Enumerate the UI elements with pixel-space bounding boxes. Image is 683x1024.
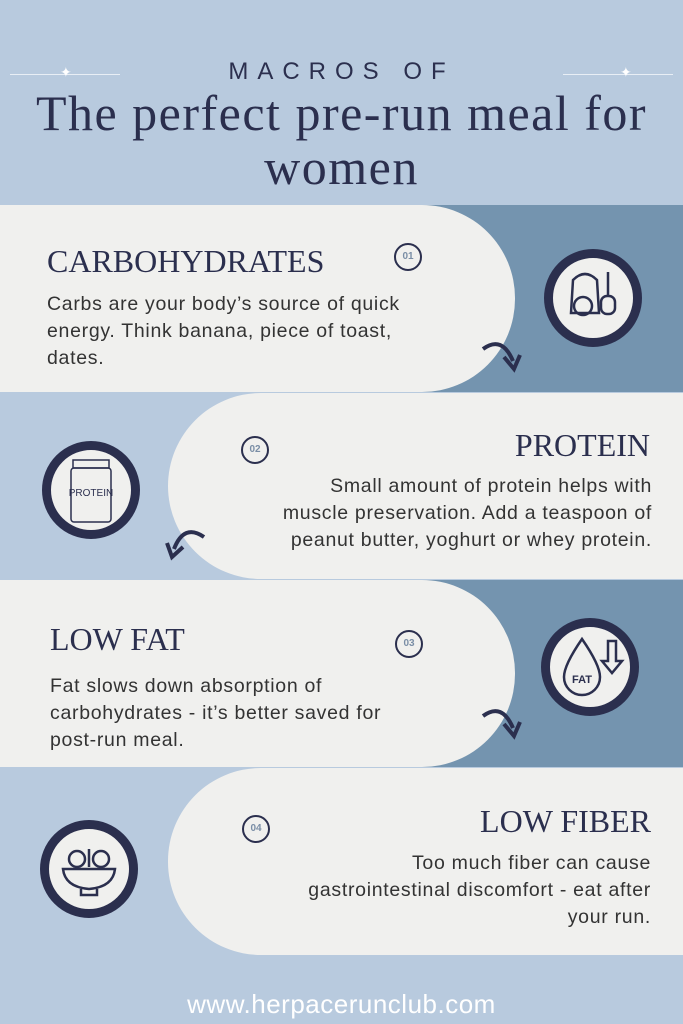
title: women: [264, 139, 419, 195]
panel: low fiber: [40, 768, 683, 955]
number 04: 04: [250, 823, 262, 834]
heading: low fiber: LOW FIBER: [480, 803, 651, 839]
text: fiber: gastrointestinal discomfort - eat after: [308, 879, 651, 901]
number 04: [242, 815, 270, 843]
text: fat: [50, 675, 381, 751]
icon: salad bowl: [40, 820, 138, 918]
text: fat: Fat slows down absorption of: [50, 675, 322, 697]
number 01: 01: [402, 251, 414, 262]
text: protein: [283, 475, 652, 551]
text: carbs: [47, 293, 400, 369]
icon: carbs: [544, 249, 642, 347]
icon: fat: [541, 618, 639, 716]
number 03: [395, 630, 423, 658]
text: carbs: dates.: [47, 347, 104, 369]
number 03: 03: [403, 638, 415, 649]
arrow: [165, 530, 206, 560]
text: carbs: Carbs are your body’s source of quick: [47, 293, 400, 315]
icon: fat: FAT: [572, 674, 592, 686]
arrow: [482, 342, 522, 373]
heading: protein: PROTEIN: [515, 427, 650, 463]
text: fiber: [308, 852, 651, 928]
panel: protein: [42, 393, 683, 579]
icon: protein jar: PROTEIN: [69, 488, 113, 499]
text: fat: carbohydrates - it’s better saved for: [50, 702, 381, 724]
number 02: [241, 436, 269, 464]
title: The perfect pre-run meal for: [36, 85, 647, 141]
title: [36, 58, 647, 195]
number 01: [394, 243, 422, 271]
panel: low fat: [0, 580, 683, 767]
header decoration: ✦: [620, 64, 632, 80]
text: protein: muscle preservation. Add a teaspoon of: [283, 502, 652, 524]
heading: low fat: LOW FAT: [50, 621, 185, 657]
footer url: www.herpacerunclub.com: [187, 989, 496, 1019]
number 02: 02: [249, 444, 261, 455]
icon: protein jar: [42, 441, 140, 539]
arrow: [482, 709, 522, 740]
title: MACROS OF: [228, 58, 455, 85]
heading: carbohydrates: CARBOHYDRATES: [47, 243, 324, 279]
text: fiber: Too much fiber can cause: [412, 852, 651, 874]
header decoration: ✦: [60, 64, 72, 80]
text: fat: post-run meal.: [50, 729, 184, 751]
text: fiber: your run.: [568, 906, 651, 928]
panel: carbohydrates: [0, 205, 683, 392]
text: carbs: energy. Think banana, piece of toast,: [47, 320, 392, 342]
header decoration: [10, 64, 673, 80]
text: protein: peanut butter, yoghurt or whey protein.: [291, 529, 652, 551]
text: protein: Small amount of protein helps with: [330, 475, 652, 497]
